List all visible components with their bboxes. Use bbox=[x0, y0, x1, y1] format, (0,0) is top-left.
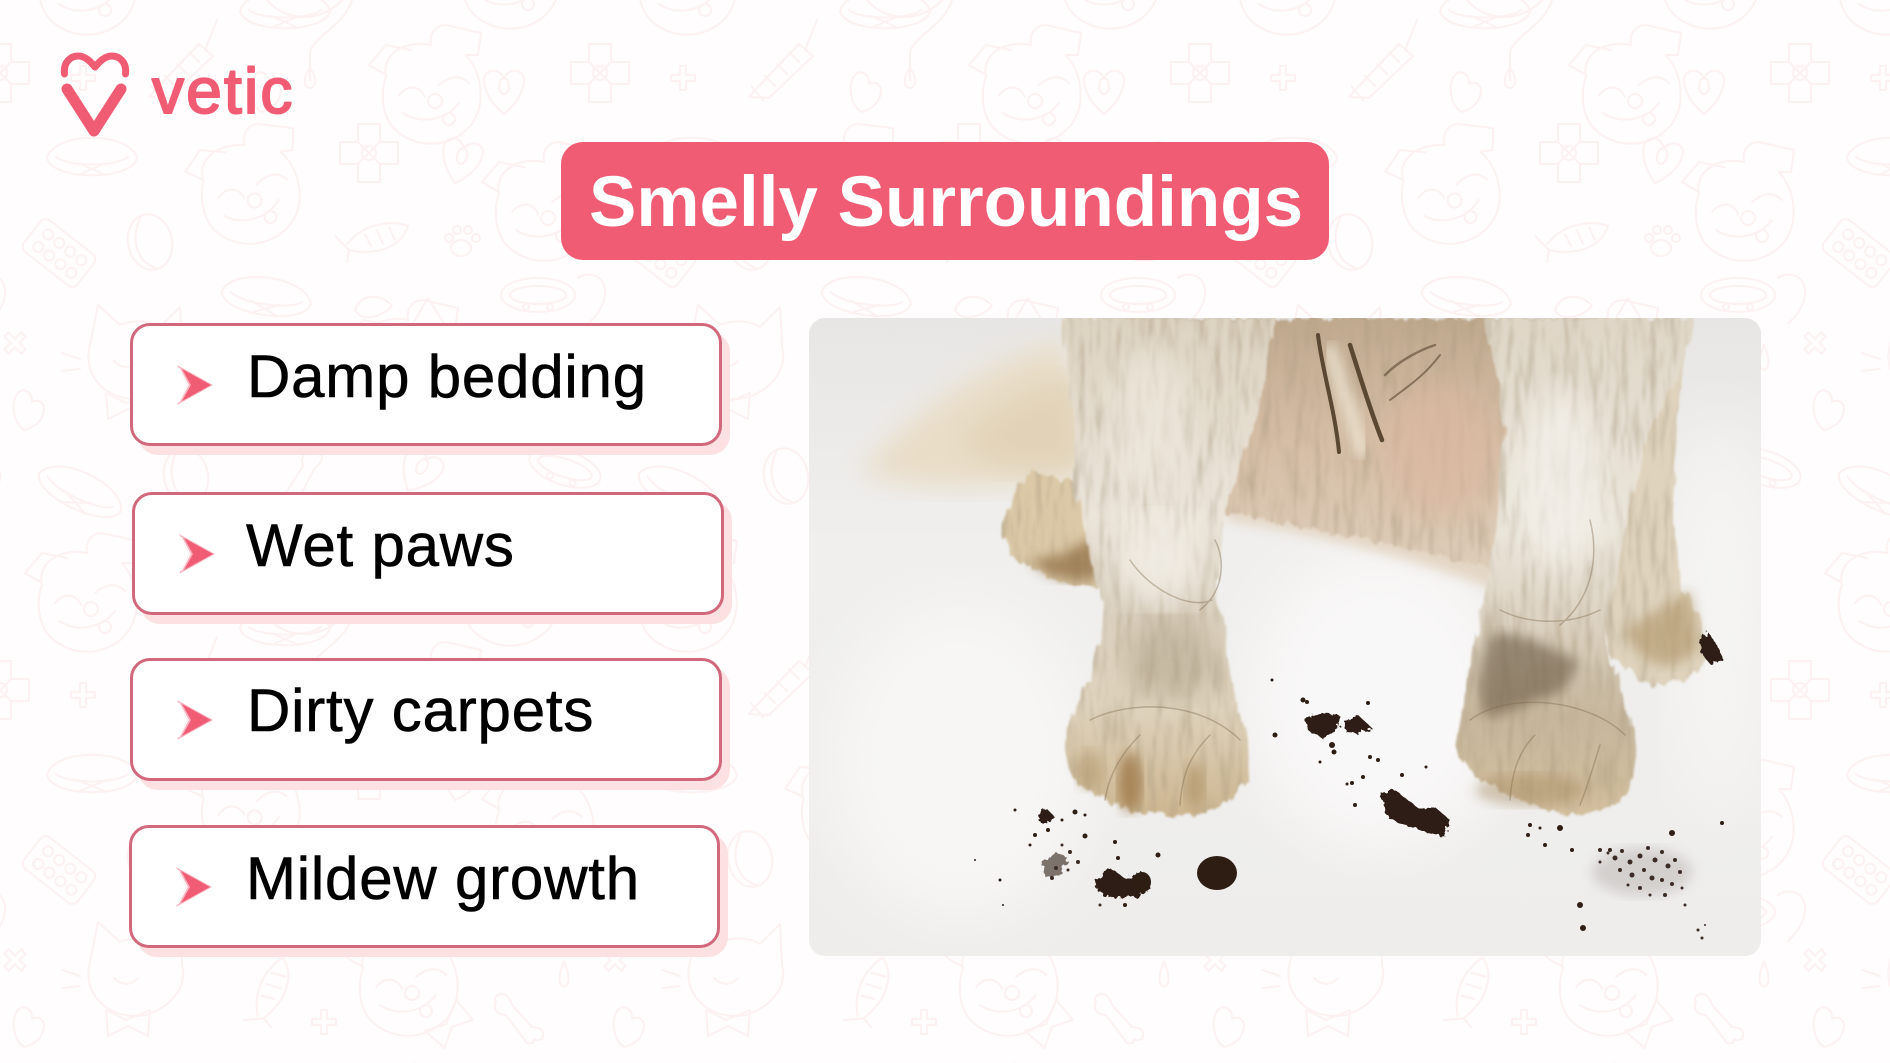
item text: Mildew growth bbox=[246, 845, 640, 912]
list card: Mildew growth bbox=[129, 825, 720, 948]
list card: Wet paws bbox=[132, 492, 724, 615]
icon: arrow bbox=[179, 534, 215, 574]
logo wordmark: vetic bbox=[152, 55, 295, 127]
icon: heart and V mark bbox=[64, 56, 126, 131]
title text: Smelly Surroundings bbox=[589, 163, 1303, 242]
rear paw mud bbox=[1030, 535, 1700, 665]
icon: arrow bbox=[177, 700, 213, 740]
list card: Damp bedding bbox=[130, 323, 722, 446]
item text: Dirty carpets bbox=[247, 677, 594, 744]
fur strands bbox=[1090, 520, 1625, 805]
dirt clumps bbox=[974, 632, 1724, 931]
logo: vetic bbox=[60, 52, 295, 136]
front left leg bbox=[1060, 318, 1275, 816]
dog belly bbox=[1100, 318, 1600, 590]
chest streaks bbox=[1318, 335, 1440, 452]
front right leg bbox=[1455, 318, 1695, 815]
item text: Damp bedding bbox=[247, 343, 647, 410]
photo: muddy dog paws on white carpet bbox=[809, 318, 1761, 956]
tail bbox=[860, 340, 1090, 487]
list card: Dirty carpets bbox=[130, 658, 722, 781]
paw mud shading bbox=[1076, 350, 1605, 812]
item text: Wet paws bbox=[246, 512, 515, 579]
rear paws bbox=[1006, 350, 1705, 684]
icon: arrow bbox=[177, 365, 213, 405]
carpet bbox=[809, 318, 1770, 956]
title banner bbox=[561, 142, 1329, 260]
soil speckles bbox=[1050, 844, 1706, 940]
icon: arrow bbox=[176, 867, 212, 907]
